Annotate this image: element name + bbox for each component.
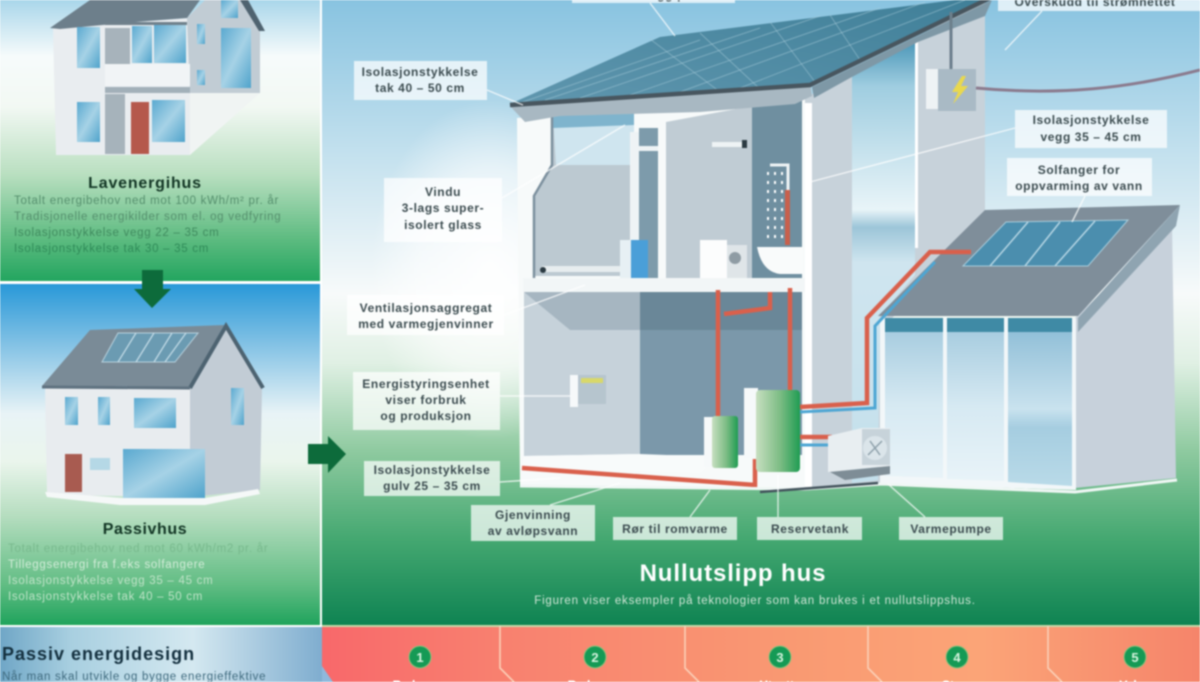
floor slab bbox=[523, 278, 805, 292]
arrow: down bbox=[134, 270, 171, 308]
lower room bbox=[524, 292, 640, 456]
solar roof bbox=[510, 0, 992, 105]
text block: lavenergihus facts: Isolasjonstykkelse vegg 22 – 35 cm bbox=[14, 227, 219, 239]
callout: floor insulation bbox=[364, 461, 560, 496]
callout: heat pump: Varmepumpe bbox=[910, 522, 992, 536]
extension side wall bbox=[1075, 225, 1176, 488]
callout: roof insulation: Isolasjonstykkelse bbox=[362, 65, 478, 79]
icon: passive house bbox=[42, 325, 263, 505]
callout: waste water recovery: av avløpsvann bbox=[488, 524, 578, 538]
step 1: 1 bbox=[416, 650, 424, 665]
water tank bbox=[540, 240, 648, 278]
text block: passivhus facts bbox=[8, 543, 268, 603]
callout: wall insulation bbox=[810, 110, 1167, 182]
text block: passivhus facts: Tilleggsenergi fra f.eks solfangere bbox=[8, 559, 205, 571]
heading: Nullutslipp hus: Nullutslipp hus bbox=[640, 560, 826, 587]
heat pump bbox=[828, 428, 890, 480]
text block: passivhus facts: Isolasjonstykkelse tak 40 – 50 cm bbox=[8, 591, 203, 603]
illustration: zero emission house bbox=[510, 0, 1200, 492]
step 2 bbox=[568, 646, 623, 682]
callout: ventilation bbox=[347, 285, 585, 335]
callout: wall insulation: Isolasjonstykkelse bbox=[1033, 113, 1149, 127]
sink bbox=[757, 247, 803, 274]
callout: solar cells bbox=[572, 0, 735, 36]
callout: solar collector: Solfanger for bbox=[1038, 163, 1120, 177]
callout: energy control: viser forbruk bbox=[385, 393, 467, 407]
panel: passive energy design bbox=[0, 627, 322, 682]
interior heat pipes bbox=[522, 288, 790, 485]
panel: passivhus background bbox=[0, 284, 320, 625]
small tank bbox=[704, 416, 738, 468]
upper room back wall bbox=[666, 106, 752, 278]
text block: lavenergihus facts bbox=[14, 195, 281, 255]
caption: Figuren viser eksempler på teknologier som kan brukes i et nullutslippshus. bbox=[534, 595, 976, 607]
exterior pipes bbox=[800, 252, 971, 445]
step 2: 2 bbox=[591, 650, 599, 665]
callout: wall insulation: vegg 35 – 45 cm bbox=[1040, 130, 1142, 144]
section shell bbox=[517, 98, 805, 488]
callout: window bbox=[384, 125, 625, 242]
washing machine bbox=[700, 240, 747, 278]
callout: ventilation: Ventilasjonsaggregat bbox=[360, 301, 492, 315]
energy display bbox=[570, 375, 606, 407]
text block: lavenergihus facts: Isolasjonstykkelse tak 30 – 35 cm bbox=[14, 243, 209, 255]
callout: pipes: Rør til romvarme bbox=[622, 522, 728, 536]
main house right wall bbox=[805, 0, 985, 488]
callout: roof insulation bbox=[354, 61, 523, 105]
callout: floor insulation: gulv 25 – 35 cm bbox=[383, 479, 481, 493]
step 5: 5 bbox=[1131, 650, 1139, 665]
text block: lavenergihus facts: Tradisjonelle energikilder som el. og vedfyring bbox=[14, 211, 281, 223]
callout: ventilation: med varmegjenvinner bbox=[358, 317, 494, 331]
callout: solar collector: oppvarming av vann bbox=[1015, 179, 1143, 193]
callout: reserve tank bbox=[757, 475, 862, 540]
callout: window: Vindu bbox=[425, 185, 461, 199]
ground edge bbox=[520, 480, 1177, 492]
panel: salmon steps bbox=[322, 625, 1200, 682]
callout: surplus to grid bbox=[998, 0, 1200, 50]
step 1 bbox=[393, 646, 448, 682]
callout: solar collector bbox=[1007, 158, 1152, 222]
panel: lavenergihus background bbox=[0, 0, 320, 281]
text block: passivhus facts: Totalt energibehov ned mot 60 kWh/m2 pr. år bbox=[8, 543, 268, 555]
callout: waste water recovery bbox=[471, 483, 620, 541]
arrow: right bbox=[308, 436, 346, 473]
callout: heat pump bbox=[888, 484, 1003, 540]
reserve tank bbox=[744, 388, 800, 472]
icon: low energy house bbox=[50, 0, 265, 155]
text block: passivhus facts: Isolasjonstykkelse vegg 35 – 45 cm bbox=[8, 575, 213, 587]
text block: lavenergihus facts: Totalt energibehov ned mot 100 kWh/m² pr. år bbox=[14, 195, 279, 207]
callout: window: isolert glass bbox=[404, 218, 482, 232]
extension glass bbox=[880, 318, 1076, 490]
callout: pipes bbox=[613, 490, 737, 540]
step 4: 4 bbox=[953, 650, 961, 665]
callout: roof insulation: tak 40 – 50 cm bbox=[375, 81, 465, 95]
upper room left bbox=[535, 112, 630, 276]
panel: passive energy design: Passiv energidesign bbox=[2, 644, 195, 664]
heading: Lavenergihus: Lavenergihus bbox=[88, 175, 202, 192]
callout: window: 3-lags super- bbox=[402, 201, 484, 215]
step 5 bbox=[1119, 646, 1151, 682]
step 3 bbox=[759, 646, 801, 682]
inverter bbox=[926, 12, 1200, 111]
step 3: 3 bbox=[776, 650, 784, 665]
extension roof bbox=[878, 205, 1180, 332]
callout: energy control: og produksjon bbox=[380, 409, 472, 423]
callout: energy control: Energistyringsenhet bbox=[362, 377, 490, 391]
facade glass bbox=[852, 42, 915, 483]
panel: nullutslipp background bbox=[322, 0, 1200, 625]
callout: energy control bbox=[353, 372, 570, 430]
shower bbox=[768, 165, 790, 245]
floor bbox=[522, 454, 720, 473]
callout: floor insulation: Isolasjonstykkelse bbox=[374, 463, 490, 477]
heading: Passivhus: Passivhus bbox=[103, 521, 187, 538]
step 4 bbox=[942, 646, 972, 682]
callout: waste water recovery: Gjenvinning bbox=[495, 508, 571, 522]
callout: reserve tank: Reservetank bbox=[771, 522, 849, 536]
